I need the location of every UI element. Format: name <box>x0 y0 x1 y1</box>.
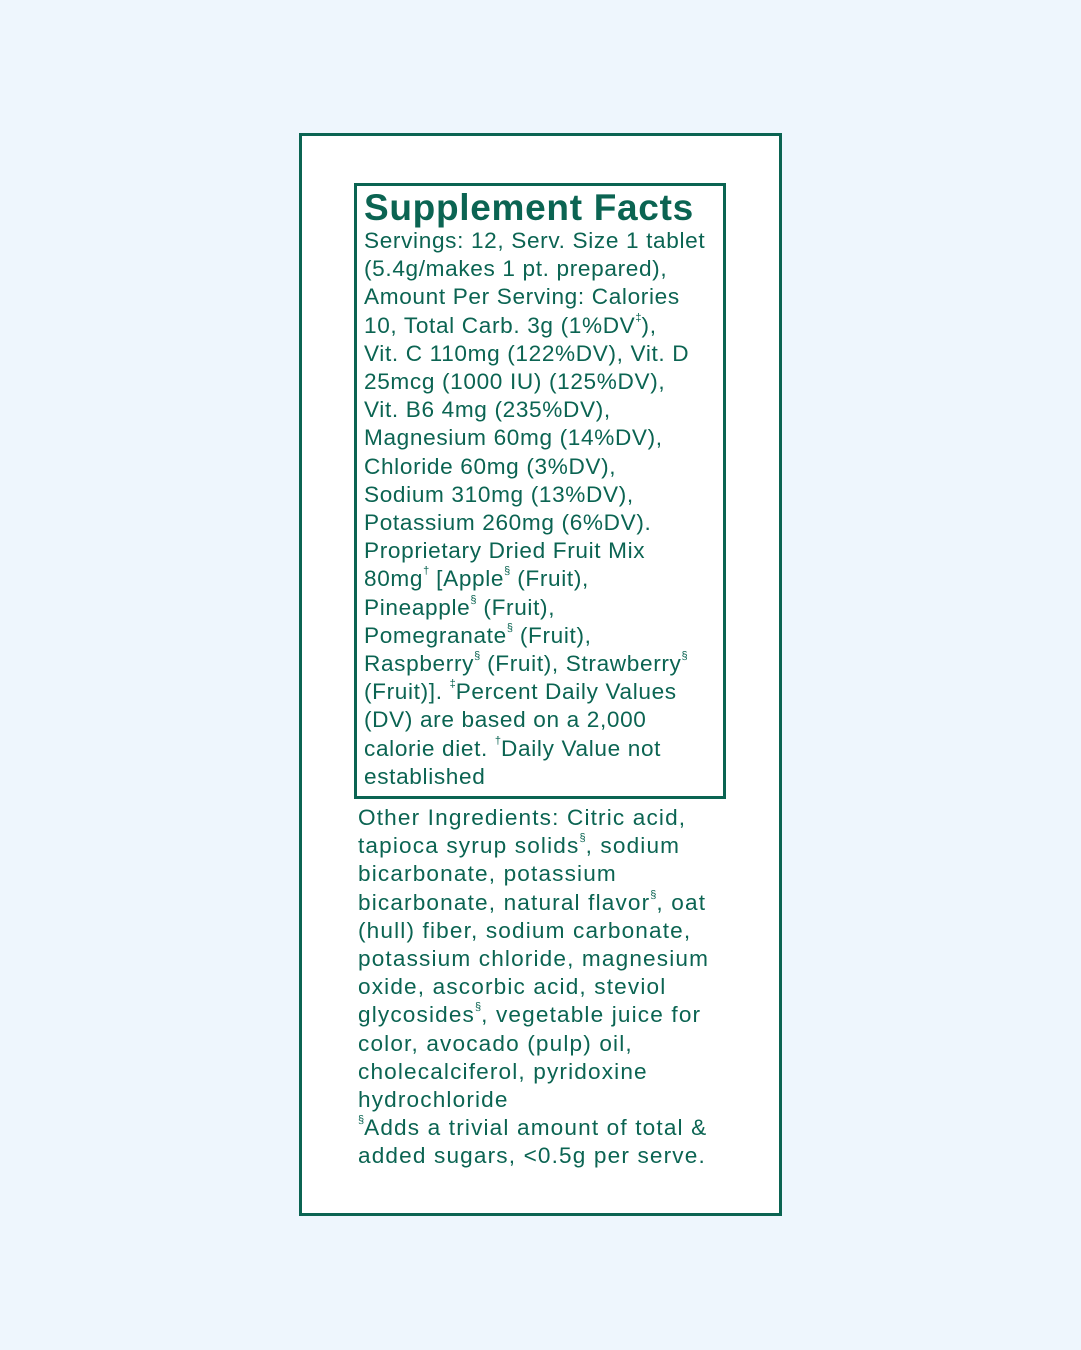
text block: supplement facts: Potassium 260mg (6%DV). <box>364 510 651 535</box>
text block: supplement facts: Proprietary Dried Fruit Mix <box>364 538 645 563</box>
text block: other ingredients: glycosides§, vegetable juice for <box>358 1001 701 1027</box>
panel: label outer box <box>299 133 782 1216</box>
text block: other ingredients: added sugars, <0.5g per serve. <box>358 1143 706 1168</box>
text block: other ingredients: color, avocado (pulp) oil, <box>358 1031 633 1056</box>
text block: supplement facts: Pomegranate§ (Fruit), <box>364 622 592 648</box>
text block: supplement facts: (5.4g/makes 1 pt. prepared), <box>364 256 667 281</box>
text block: other ingredients: hydrochloride <box>358 1087 509 1112</box>
text block: other ingredients: §Adds a trivial amount of total & <box>358 1114 707 1140</box>
text block: supplement facts: calorie diet. †Daily Value not <box>364 735 661 761</box>
text block: supplement facts: Servings: 12, Serv. Size 1 tablet <box>364 228 705 253</box>
text block: other ingredients: oxide, ascorbic acid, steviol <box>358 974 666 999</box>
text block: other ingredients: cholecalciferol, pyridoxine <box>358 1059 648 1084</box>
text block: supplement facts: Pineapple§ (Fruit), <box>364 594 555 620</box>
text block: supplement facts: Chloride 60mg (3%DV), <box>364 454 616 479</box>
panel: supplement facts box <box>354 183 726 799</box>
text block: other ingredients: bicarbonate, natural flavor§, oat <box>358 889 706 915</box>
text block: supplement facts: Magnesium 60mg (14%DV), <box>364 425 663 450</box>
text block: supplement facts: (DV) are based on a 2,000 <box>364 707 647 732</box>
text block: supplement facts: Vit. B6 4mg (235%DV), <box>364 397 611 422</box>
text block: supplement facts: Vit. C 110mg (122%DV), Vit. D <box>364 341 689 366</box>
text block: supplement facts: Amount Per Serving: Calories <box>364 284 680 309</box>
text block: other ingredients: tapioca syrup solids§, sodium <box>358 832 680 858</box>
text block: supplement facts: Sodium 310mg (13%DV), <box>364 482 634 507</box>
text block: supplement facts: 25mcg (1000 IU) (125%DV), <box>364 369 665 394</box>
text block: other ingredients: (hull) fiber, sodium carbonate, <box>358 918 691 943</box>
text block: other ingredients <box>358 805 709 1168</box>
text block: other ingredients: Other Ingredients: Citric acid, <box>358 805 686 830</box>
text block: supplement facts: (Fruit)]. ‡Percent Daily Values <box>364 678 677 704</box>
text block: supplement facts: Raspberry§ (Fruit), Strawberry§ <box>364 650 688 676</box>
title: Supplement Facts <box>364 187 694 228</box>
text block: supplement facts <box>364 228 705 789</box>
text block: supplement facts: established <box>364 764 485 789</box>
text block: supplement facts: 10, Total Carb. 3g (1%DV‡), <box>364 312 657 338</box>
text block: other ingredients: potassium chloride, magnesium <box>358 946 709 971</box>
text block: supplement facts: 80mg† [Apple§ (Fruit), <box>364 565 589 591</box>
text block: other ingredients: bicarbonate, potassium <box>358 861 617 886</box>
